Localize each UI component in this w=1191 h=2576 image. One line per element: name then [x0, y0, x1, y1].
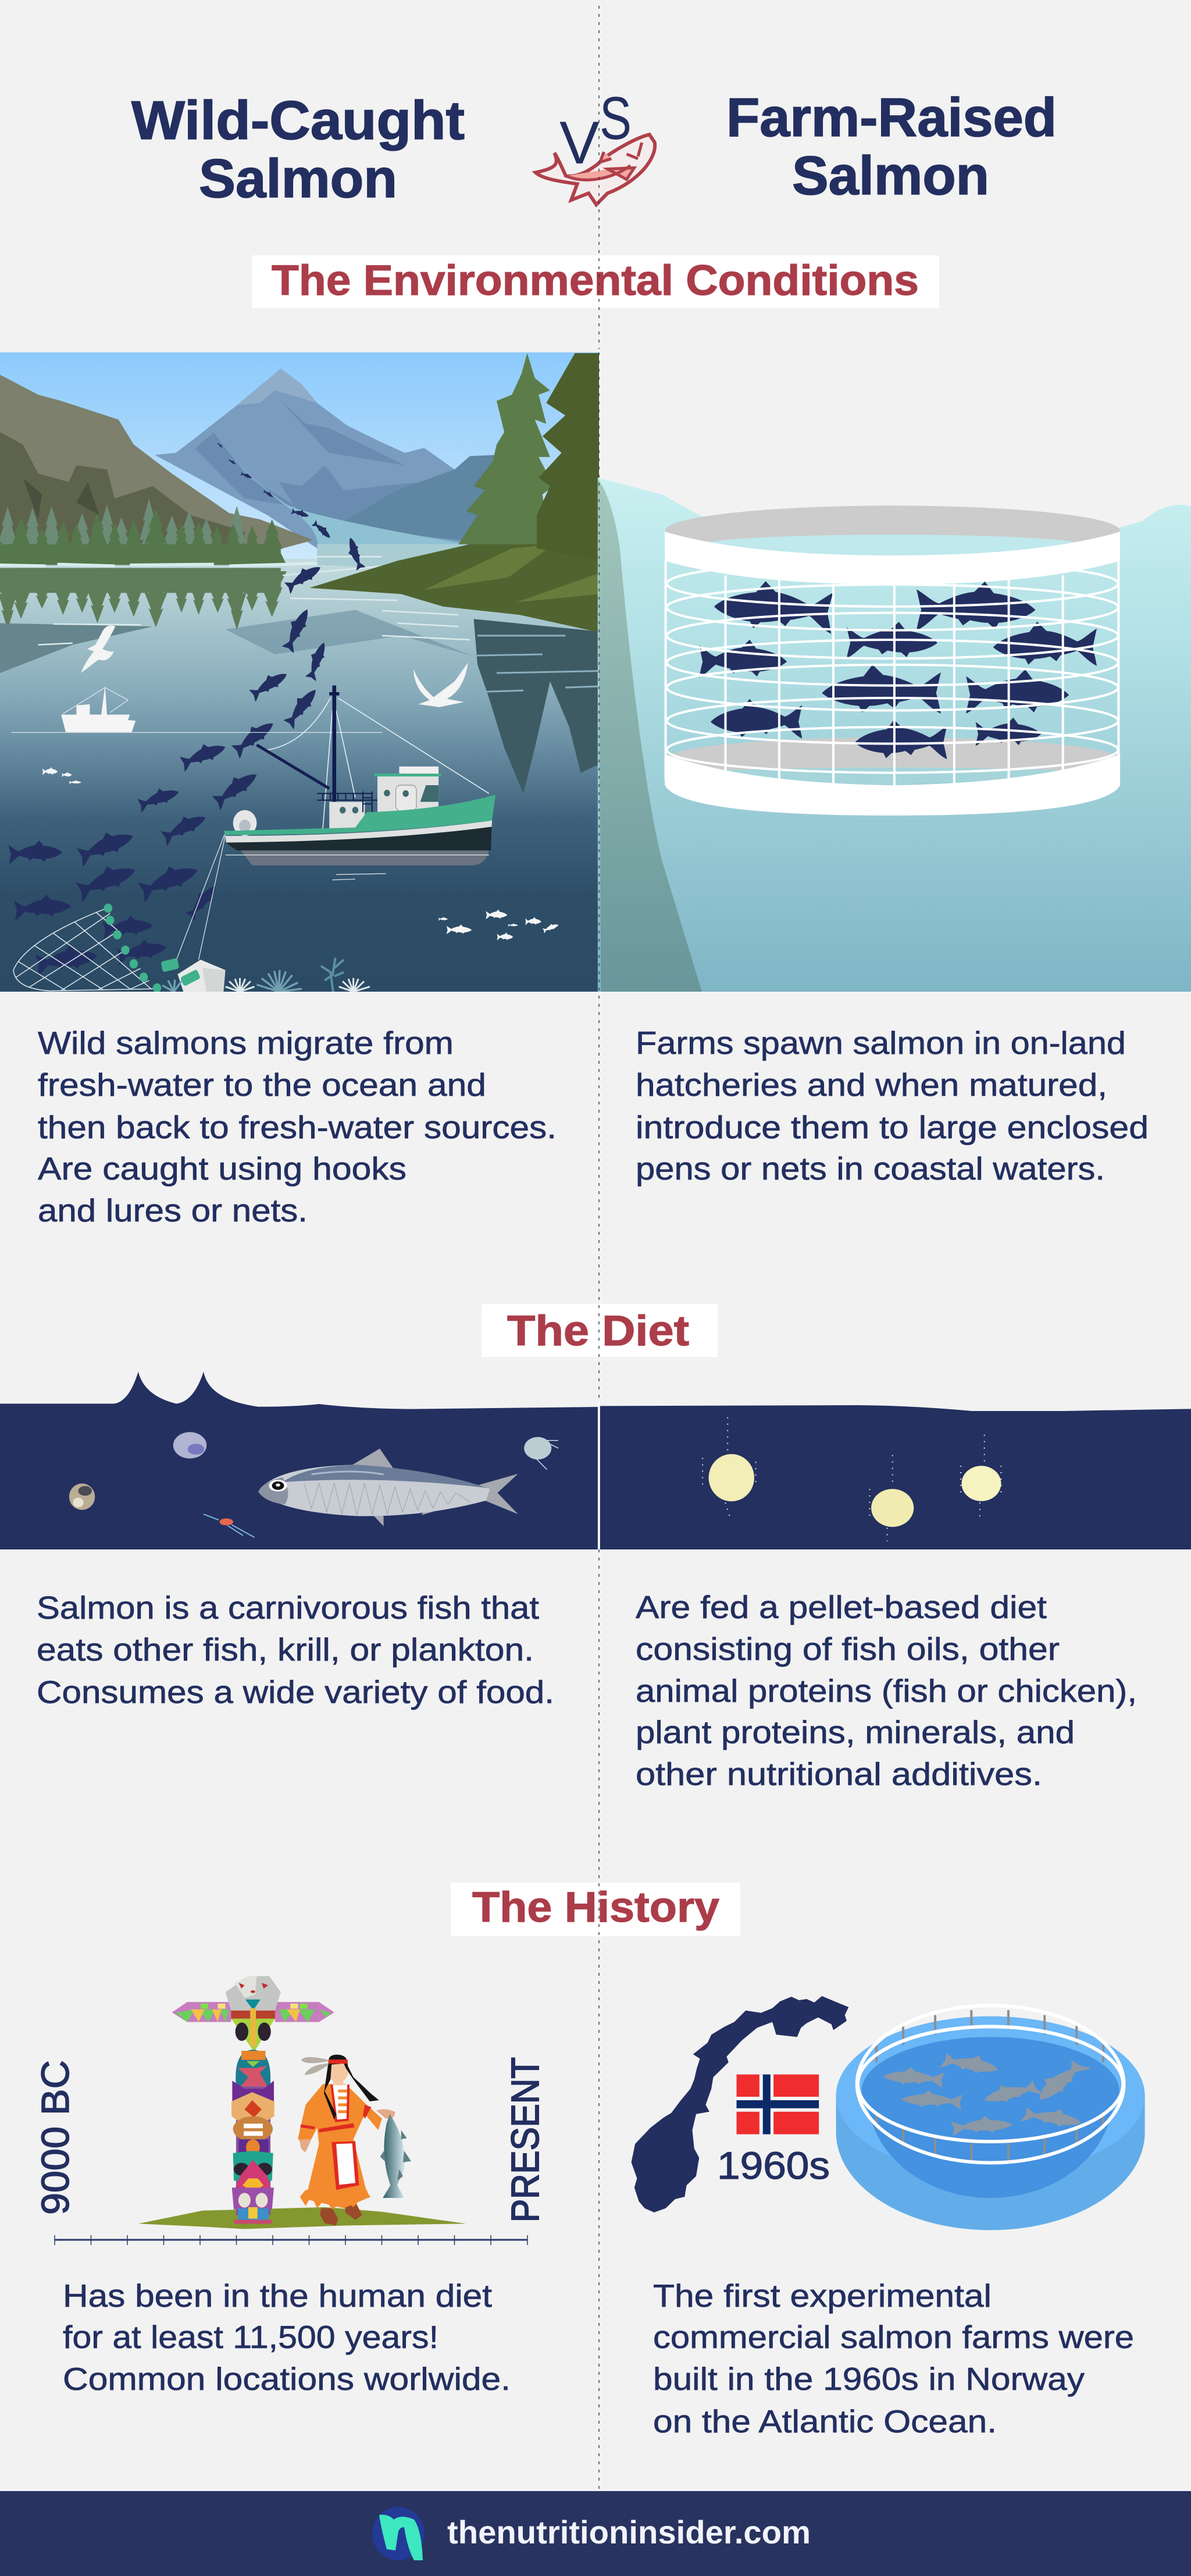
icon: vs salmon — [536, 134, 655, 205]
text: farm history: commercial salmon farms were — [653, 2319, 1134, 2355]
fishing boat — [223, 686, 495, 865]
text: wild environment: fresh-water to the ocean and — [38, 1067, 486, 1103]
title: farm-raised: Farm-Raised — [726, 87, 1057, 148]
text: farm diet: plant proteins, minerals, and — [636, 1714, 1075, 1750]
heading: diet: The Diet — [507, 1307, 689, 1355]
footer — [0, 2491, 1191, 2576]
heading: history: The History — [472, 1884, 719, 1931]
sea bed slope — [598, 479, 702, 992]
right water — [600, 1405, 1191, 1549]
map of norway — [632, 1996, 848, 2212]
title: wild-caught: Salmon — [199, 148, 397, 209]
right shore — [309, 544, 598, 632]
vs text — [559, 85, 632, 177]
text: wild environment — [38, 1025, 557, 1228]
corals — [162, 957, 370, 992]
vs text: V — [559, 109, 600, 177]
forest and reflection — [0, 498, 317, 630]
title: farm-raised: Salmon — [792, 145, 989, 206]
pen bottom band — [665, 754, 1120, 815]
text: wild environment: then back to fresh-water sources. — [38, 1109, 557, 1145]
totem pole — [172, 1976, 334, 2224]
panel: wild salmon scene — [0, 352, 599, 997]
history illustration — [138, 1976, 466, 2229]
railing — [857, 2005, 1124, 2163]
small white fishes left — [42, 767, 81, 784]
sky — [0, 352, 599, 572]
title: wild-caught — [131, 90, 465, 209]
timeline — [55, 2235, 527, 2245]
text: farm environment: introduce them to large enclosed — [636, 1109, 1149, 1145]
farmed fish — [882, 2050, 1092, 2136]
title: farm-raised — [726, 87, 1057, 206]
text: farm environment: Farms spawn salmon in on-land — [636, 1025, 1126, 1061]
text: wild environment: Are caught using hooks — [38, 1150, 406, 1187]
wild salmon run — [8, 442, 365, 975]
text: farm environment: hatcheries and when matured, — [636, 1067, 1107, 1103]
text: farm history: The first experimental — [653, 2278, 992, 2314]
text: wild history — [63, 2278, 511, 2397]
fish tank — [836, 2005, 1145, 2230]
band separator — [598, 1402, 600, 1549]
text: wild diet: Consumes a wide variety of food. — [37, 1674, 554, 1710]
heading: environmental conditions: The Environmental Conditions — [272, 257, 919, 304]
text: farm diet: Are fed a pellet-based diet — [636, 1589, 1047, 1625]
distant white boat — [12, 686, 382, 732]
water — [598, 478, 1191, 992]
text: farm history: built in the 1960s in Norway — [653, 2361, 1085, 2397]
text: farm diet: animal proteins (fish or chicken), — [636, 1673, 1137, 1709]
label: 9000 BC: 9000 BC — [34, 2060, 77, 2215]
blue mountain — [155, 369, 497, 548]
caged salmon — [699, 578, 1097, 759]
footer url: thenutritioninsider.com — [447, 2514, 811, 2550]
lake water — [0, 559, 599, 993]
text: wild history: for at least 11,500 years! — [63, 2319, 438, 2355]
icon: logo — [372, 2507, 425, 2560]
text: farm history — [653, 2278, 1134, 2439]
pen rim — [665, 505, 1120, 585]
text: wild environment: Wild salmons migrate from — [38, 1025, 454, 1061]
tree reflection — [474, 619, 599, 793]
text: wild diet: Salmon is a carnivorous fish that — [37, 1590, 539, 1626]
flag of norway — [737, 2075, 819, 2134]
text: farm environment — [636, 1025, 1149, 1187]
text: wild diet — [37, 1590, 554, 1710]
text: wild environment: and lures or nets. — [38, 1192, 308, 1228]
title: wild-caught: Wild-Caught — [131, 90, 465, 151]
glacier river — [210, 426, 468, 553]
label: 1960s: 1960s — [717, 2144, 830, 2187]
text: farm diet: consisting of fish oils, other — [636, 1631, 1060, 1667]
panel: farm pen scene — [598, 478, 1191, 992]
seagull right — [413, 662, 468, 707]
text: wild history: Has been in the human diet — [63, 2278, 492, 2314]
text: farm diet — [636, 1589, 1137, 1792]
text: wild diet: eats other fish, krill, or plankton. — [37, 1631, 534, 1668]
text: farm history: on the Atlantic Ocean. — [653, 2403, 997, 2439]
seagull left — [81, 626, 115, 673]
text: farm environment: pens or nets in coastal waters. — [636, 1150, 1105, 1187]
text: farm diet: other nutritional additives. — [636, 1756, 1042, 1792]
salmon prey fish — [258, 1449, 518, 1526]
vs text: S — [600, 85, 632, 152]
right trees — [458, 353, 599, 561]
left mountain — [0, 375, 313, 565]
left water — [0, 1371, 598, 1549]
pen net rings and bars — [666, 561, 1118, 785]
pen floor — [668, 737, 1117, 785]
mountain reflections — [0, 557, 474, 673]
small white fishes right — [438, 910, 559, 940]
plankton — [69, 1432, 558, 1537]
panel: diet band — [0, 1371, 1191, 1549]
woman with salmon — [298, 2055, 411, 2225]
net with floats — [12, 834, 489, 997]
feed pellets — [703, 1417, 1001, 1541]
ground — [138, 2207, 466, 2229]
text: wild history: Common locations worlwide. — [63, 2361, 511, 2397]
heading: diet — [482, 1304, 718, 1357]
label: present: PRESENT — [504, 2057, 547, 2222]
history illustration: norway — [632, 1996, 1145, 2230]
